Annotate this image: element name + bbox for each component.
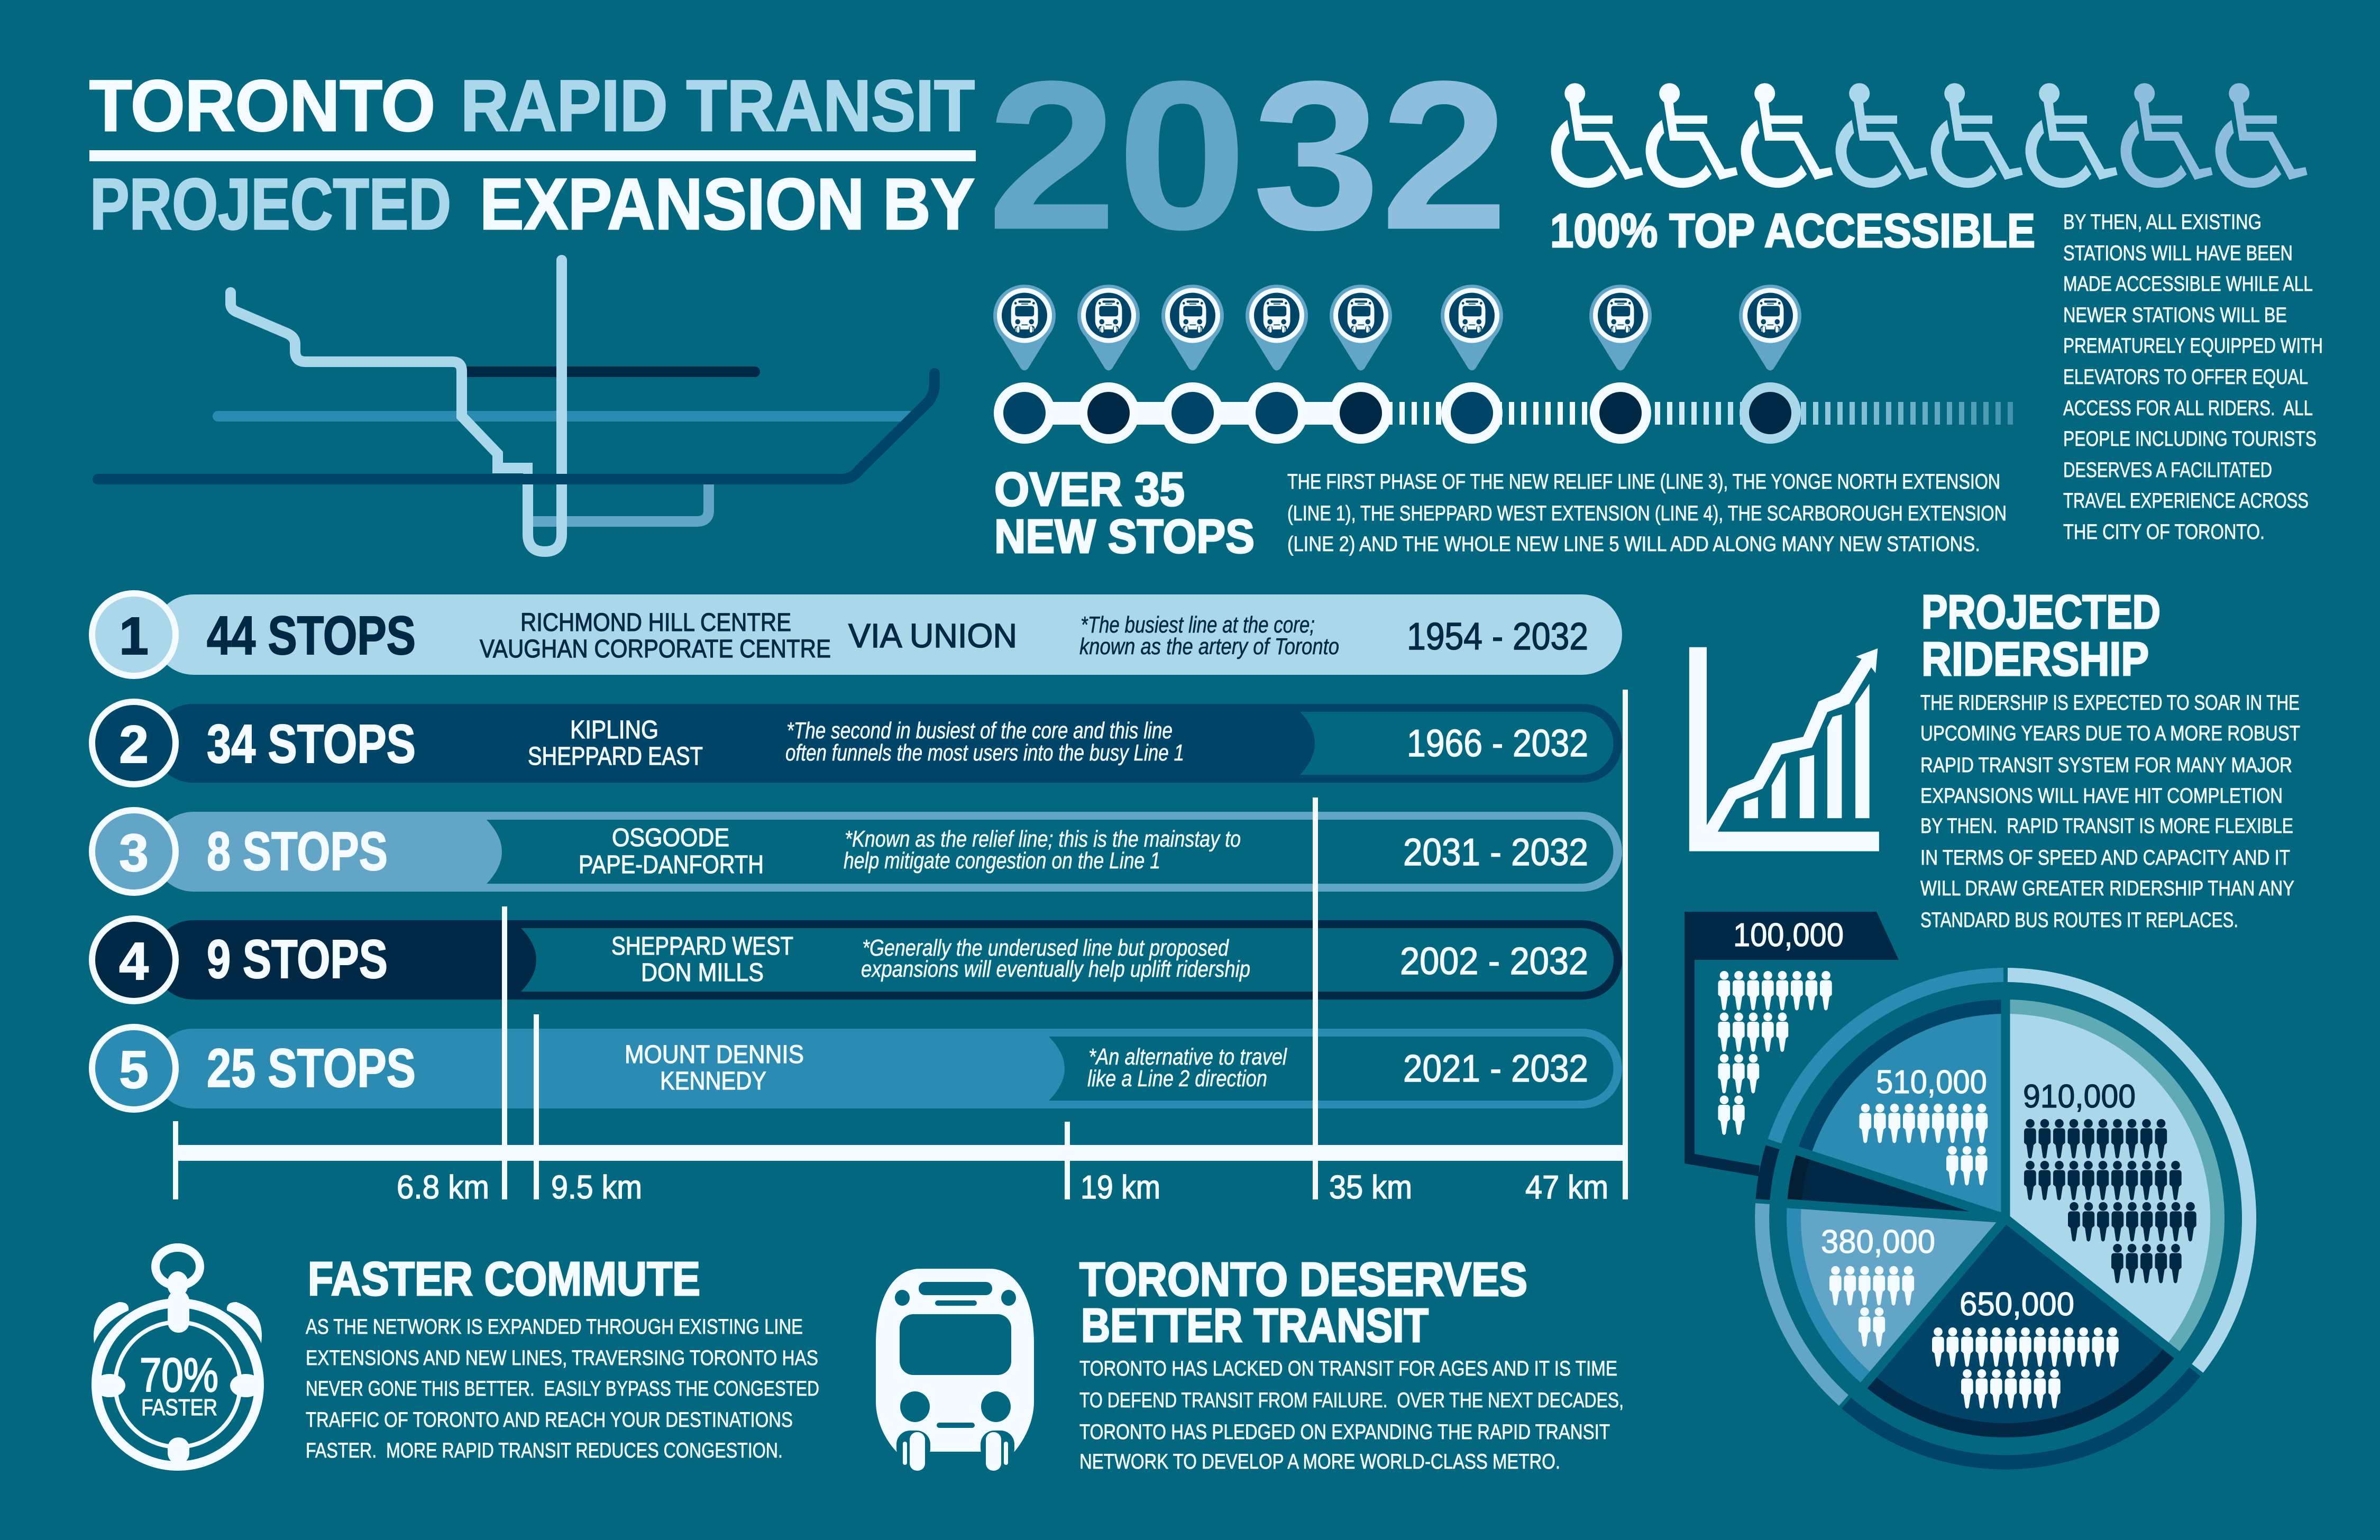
slice 380,000 [1787, 1204, 2006, 1386]
line 5 row: KENNEDY [660, 1067, 766, 1095]
new stops text [1287, 470, 2007, 556]
line 4 row: DON MILLS [641, 959, 764, 987]
line 5 row: MOUNT DENNIS [625, 1041, 804, 1069]
new stops text: (LINE 1), THE SHEPPARD WEST EXTENSION (LINE 4), THE SCARBOROUGH EXTENSION [1287, 502, 2007, 525]
projected ridership heading: RIDERSHIP [1921, 633, 2149, 686]
distance scale: 35 km [1329, 1169, 1412, 1206]
line 2 row: 2 [119, 715, 149, 774]
line 2 row: often funnels the most users into the busy Line 1 [785, 740, 1184, 766]
new stops text: (LINE 2) AND THE WHOLE NEW LINE 5 WILL ADD ALONG MANY NEW STATIONS. [1287, 533, 1980, 556]
year 2032 [987, 37, 1508, 273]
label and people: 380,000: 380,000 [1821, 1224, 1935, 1260]
accessibility text: STATIONS WILL HAVE BEEN [2063, 242, 2293, 265]
line 3 row: 3 [119, 823, 149, 883]
slice 100,000 [1787, 1151, 2006, 1218]
accessibility text: MADE ACCESSIBLE WHILE ALL [2063, 272, 2313, 296]
callout: 100,000 tab [1685, 912, 1899, 1199]
callout: 100,000 tab: 100,000 [1733, 917, 1844, 954]
distance scale: 19 km [1081, 1169, 1160, 1206]
year 2032: 20 [987, 37, 1247, 273]
faster commute heading: FASTER COMMUTE [308, 1253, 700, 1306]
line 5 row: like a Line 2 direction [1087, 1066, 1267, 1092]
faster commute text [306, 1315, 819, 1462]
icon: stopwatch 70% faster [94, 1248, 262, 1466]
slice 510,000 [1797, 1000, 2006, 1218]
label and people: 910,000: 910,000 [2023, 1078, 2136, 1115]
accessibility text: ELEVATORS TO OFFER EQUAL [2063, 365, 2308, 389]
line 4 row: *Generally the underused line but proposed [862, 935, 1229, 961]
people: 100,000 [1718, 971, 1832, 1135]
line 5 row: 2021 - 2032 [1403, 1048, 1588, 1090]
better transit text: TORONTO HAS PLEDGED ON EXPANDING THE RAPID TRANSIT [1079, 1420, 1610, 1444]
line 5 row: 25 STOPS [207, 1038, 416, 1098]
line 4 row: SHEPPARD WEST [611, 932, 793, 960]
new stops heading: OVER 35 [994, 463, 1185, 516]
line 4 row: 2002 - 2032 [1400, 940, 1588, 983]
icon: stopwatch 70% faster: 70% [140, 1349, 218, 1402]
new stops heading [994, 463, 1255, 563]
projected ridership heading [1921, 586, 2161, 686]
better transit text: TORONTO HAS LACKED ON TRANSIT FOR AGES AND IT IS TIME [1079, 1357, 1617, 1380]
icon: stopwatch 70% faster: FASTER [141, 1395, 217, 1420]
accessibility text: BY THEN, ALL EXISTING [2063, 210, 2262, 234]
line 1 row: 44 STOPS [207, 605, 416, 666]
title: PROJECTED [90, 164, 451, 245]
distance scale [173, 690, 1628, 1206]
new stops text: THE FIRST PHASE OF THE NEW RELIEF LINE (LINE 3), THE YONGE NORTH EXTENSION [1287, 470, 2000, 493]
line 1 row: known as the artery of Toronto [1079, 634, 1339, 659]
title [89, 66, 976, 245]
better transit text: NETWORK TO DEVELOP A MORE WORLD-CLASS METRO. [1079, 1450, 1560, 1473]
better transit heading [1079, 1253, 1527, 1352]
line 5 row [92, 1027, 1622, 1110]
icon: bus front [876, 1269, 1034, 1471]
line 1 row [92, 593, 1622, 676]
accessible heading: 100% TOP ACCESSIBLE [1550, 205, 2035, 258]
line 4 row: 9 STOPS [207, 929, 388, 989]
label and people: 650,000: 650,000 [1960, 1286, 2074, 1323]
line 5 row: 5 [119, 1040, 149, 1099]
accessibility text: ACCESS FOR ALL RIDERS. ALL [2063, 397, 2313, 420]
better transit text: TO DEFEND TRANSIT FROM FAILURE. OVER THE NEXT DECADES, [1079, 1389, 1624, 1412]
label and people: 510,000 [1860, 1064, 1988, 1186]
line 1 row: VAUGHAN CORPORATE CENTRE [480, 635, 831, 663]
line 4 row [92, 919, 1622, 1001]
icon: rising ridership chart [1689, 647, 1879, 851]
distance scale: 47 km [1525, 1169, 1608, 1206]
accessibility icons [1551, 83, 2308, 188]
line 3 row [92, 810, 1622, 893]
line 1 row: *The busiest line at the core; [1081, 612, 1315, 638]
label and people: 380,000 [1821, 1224, 1935, 1346]
line 1 row: RICHMOND HILL CENTRE [520, 609, 791, 637]
line 1 row: VIA UNION [848, 617, 1017, 655]
stops line [994, 382, 2016, 444]
accessibility text: THE CITY OF TORONTO. [2063, 520, 2265, 544]
projected ridership text: STANDARD BUS ROUTES IT REPLACES. [1920, 909, 2238, 932]
projected ridership text: WILL DRAW GREATER RIDERSHIP THAN ANY [1920, 877, 2294, 900]
line 2 row: 1966 - 2032 [1407, 722, 1588, 765]
title: EXPANSION BY [480, 164, 975, 245]
projected ridership text: RAPID TRANSIT SYSTEM FOR MANY MAJOR [1920, 754, 2292, 777]
line 5 row: *An alternative to travel [1088, 1044, 1287, 1070]
better transit text [1079, 1357, 1624, 1473]
line 3 row: OSGOODE [612, 824, 729, 852]
projected ridership heading: PROJECTED [1921, 586, 2161, 639]
better transit heading: TORONTO DESERVES [1079, 1253, 1527, 1306]
faster commute text: FASTER. MORE RAPID TRANSIT REDUCES CONGESTION. [306, 1439, 783, 1462]
projected ridership text: BY THEN. RAPID TRANSIT IS MORE FLEXIBLE [1920, 814, 2293, 838]
pie chart: ridership [1762, 975, 2249, 1462]
accessibility text: NEWER STATIONS WILL BE [2063, 304, 2287, 327]
slice 910,000 [2006, 1000, 2225, 1355]
line 3 row: *Known as the relief line; this is the mainstay to [845, 826, 1241, 852]
title: RAPID TRANSIT [461, 66, 975, 146]
projected ridership text: EXPANSIONS WILL HAVE HIT COMPLETION [1920, 784, 2283, 808]
faster commute text: TRAFFIC OF TORONTO AND REACH YOUR DESTINATIONS [306, 1408, 793, 1432]
line 3 row: 2031 - 2032 [1403, 831, 1588, 874]
line 1 row: 1954 - 2032 [1407, 616, 1588, 658]
faster commute text: EXTENSIONS AND NEW LINES, TRAVERSING TORONTO HAS [306, 1346, 818, 1370]
accessibility text: TRAVEL EXPERIENCE ACROSS [2063, 489, 2309, 512]
distance scale: 9.5 km [551, 1169, 642, 1206]
line 3 row: 8 STOPS [207, 821, 388, 882]
transit network map [98, 260, 935, 552]
line 3 row: help mitigate congestion on the Line 1 [844, 848, 1160, 874]
label and people: 510,000: 510,000 [1876, 1064, 1987, 1101]
projected ridership text: UPCOMING YEARS DUE TO A MORE ROBUST [1920, 722, 2300, 745]
line 3 row: PAPE-DANFORTH [579, 851, 764, 879]
faster commute text: NEVER GONE THIS BETTER. EASILY BYPASS THE CONGESTED [306, 1377, 819, 1400]
station pins [993, 285, 1801, 371]
projected ridership text [1920, 691, 2300, 932]
line 2 row: SHEPPARD EAST [528, 742, 703, 771]
accessibility text: DESERVES A FACILITATED [2063, 459, 2272, 482]
line 1 row: 1 [119, 607, 149, 666]
accessibility text: PEOPLE INCLUDING TOURISTS [2063, 427, 2317, 451]
new stops heading: NEW STOPS [994, 510, 1255, 563]
line 2 row: 34 STOPS [207, 713, 416, 774]
title: TORONTO [89, 66, 435, 146]
year 2032: 32 [1252, 37, 1508, 273]
line 2 row: *The second in busiest of the core and this line [786, 718, 1173, 744]
slice 650,000 [1864, 1218, 2177, 1437]
distance scale: 6.8 km [397, 1169, 489, 1206]
line 2 row [92, 702, 1622, 784]
projected ridership text: IN TERMS OF SPEED AND CAPACITY AND IT [1920, 846, 2290, 869]
line 4 row: expansions will eventually help uplift ridership [861, 956, 1250, 982]
line 2 row: KIPLING [570, 716, 658, 744]
outer ring [1762, 975, 2249, 1462]
better transit heading: BETTER TRANSIT [1081, 1299, 1429, 1352]
line 4 row: 4 [119, 932, 149, 991]
accessibility text [2063, 210, 2323, 544]
label and people: 910,000 [2023, 1078, 2196, 1283]
label and people: 650,000 [1932, 1286, 2119, 1409]
faster commute text: AS THE NETWORK IS EXPANDED THROUGH EXISTING LINE [306, 1315, 803, 1339]
